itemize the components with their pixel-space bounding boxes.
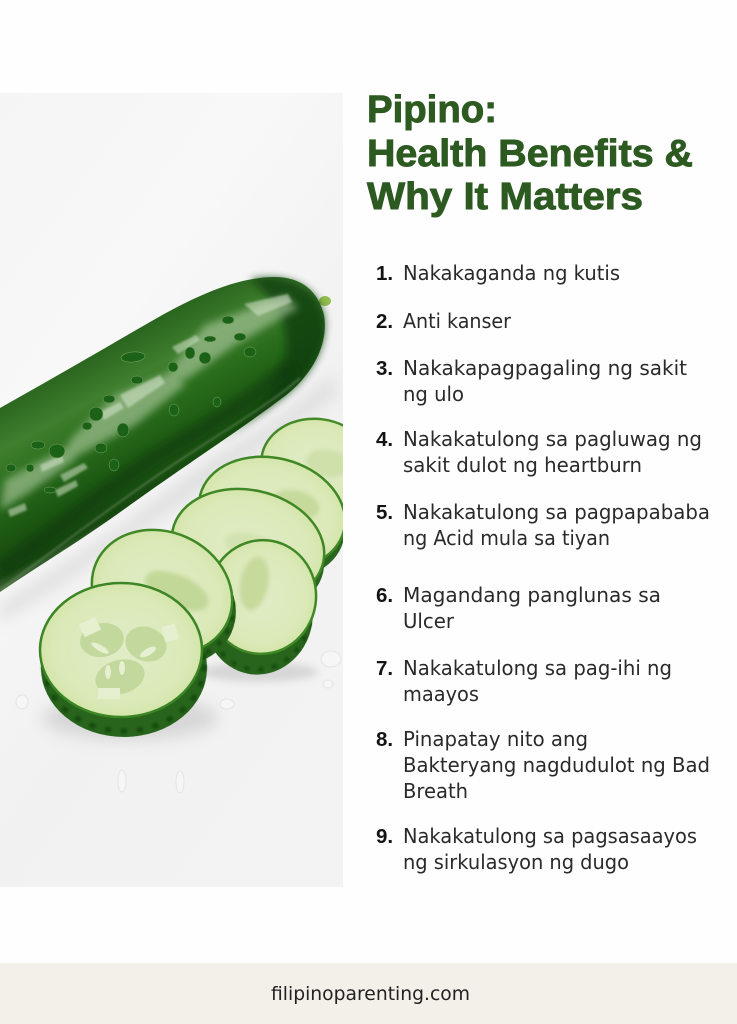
item 5: 5.: [376, 501, 393, 524]
item 7: [376, 656, 672, 706]
item 4: sakit dulot ng heartburn: [403, 453, 642, 477]
title: Health Benefits &: [367, 133, 693, 175]
slice 6: [260, 418, 343, 504]
water splashes: [16, 651, 341, 793]
item 5: [376, 500, 710, 550]
item 5: Nakakatulong sa pagpapababa: [403, 500, 710, 524]
item 2: Anti kanser: [403, 309, 512, 333]
item 8: Breath: [403, 779, 468, 803]
item 1: Nakakaganda ng kutis: [403, 261, 620, 285]
item 5: ng Acid mula sa tiyan: [403, 526, 610, 550]
item 7: Nakakatulong sa pag-ihi ng: [403, 656, 672, 680]
item 7: maayos: [403, 682, 479, 706]
item 9: Nakakatulong sa pagsasaayos: [403, 824, 697, 848]
water droplets: [6, 316, 256, 493]
item 3: ng ulo: [403, 382, 464, 406]
item 3: [376, 356, 687, 406]
benefits list: [376, 261, 710, 874]
item 4: 4.: [376, 428, 393, 451]
cucumber slices: [38, 418, 343, 744]
item 1: 1.: [376, 262, 393, 285]
item 8: 8.: [376, 728, 393, 751]
item 9: ng sirkulasyon ng dugo: [403, 850, 629, 874]
title: Pipino:: [367, 89, 497, 131]
seed pattern: [77, 617, 179, 700]
item 7: 7.: [376, 657, 393, 680]
slice 4: [171, 488, 326, 588]
item 4: Nakakatulong sa pagluwag ng: [403, 427, 702, 451]
title: Why It Matters: [367, 176, 643, 218]
item 3: Nakakapagpagaling ng sakit: [403, 356, 687, 380]
item 4: [376, 427, 702, 477]
slice 3: [216, 538, 318, 675]
item 2: 2.: [376, 310, 393, 333]
item 8: Bakteryang nagdudulot ng Bad: [403, 753, 710, 777]
item 6: [376, 583, 661, 633]
title: [367, 89, 693, 218]
item 3: 3.: [376, 357, 393, 380]
footer band: [0, 963, 737, 1024]
slice 1 front: [40, 583, 207, 737]
item 8: [376, 727, 710, 803]
item 6: Magandang panglunas sa: [403, 583, 661, 607]
photo background: [0, 93, 343, 887]
slice 5: [198, 456, 343, 568]
item 8: Pinapatay nito ang: [403, 727, 588, 751]
item 6: 6.: [376, 584, 393, 607]
footer website: filipinoparenting.com: [271, 983, 470, 1005]
panel: cucumber photo: [0, 93, 379, 887]
item 9: 9.: [376, 825, 393, 848]
item 9: [376, 824, 697, 874]
item 6: Ulcer: [403, 609, 455, 633]
slice 2: [90, 528, 236, 659]
whole cucumber: [0, 277, 335, 622]
